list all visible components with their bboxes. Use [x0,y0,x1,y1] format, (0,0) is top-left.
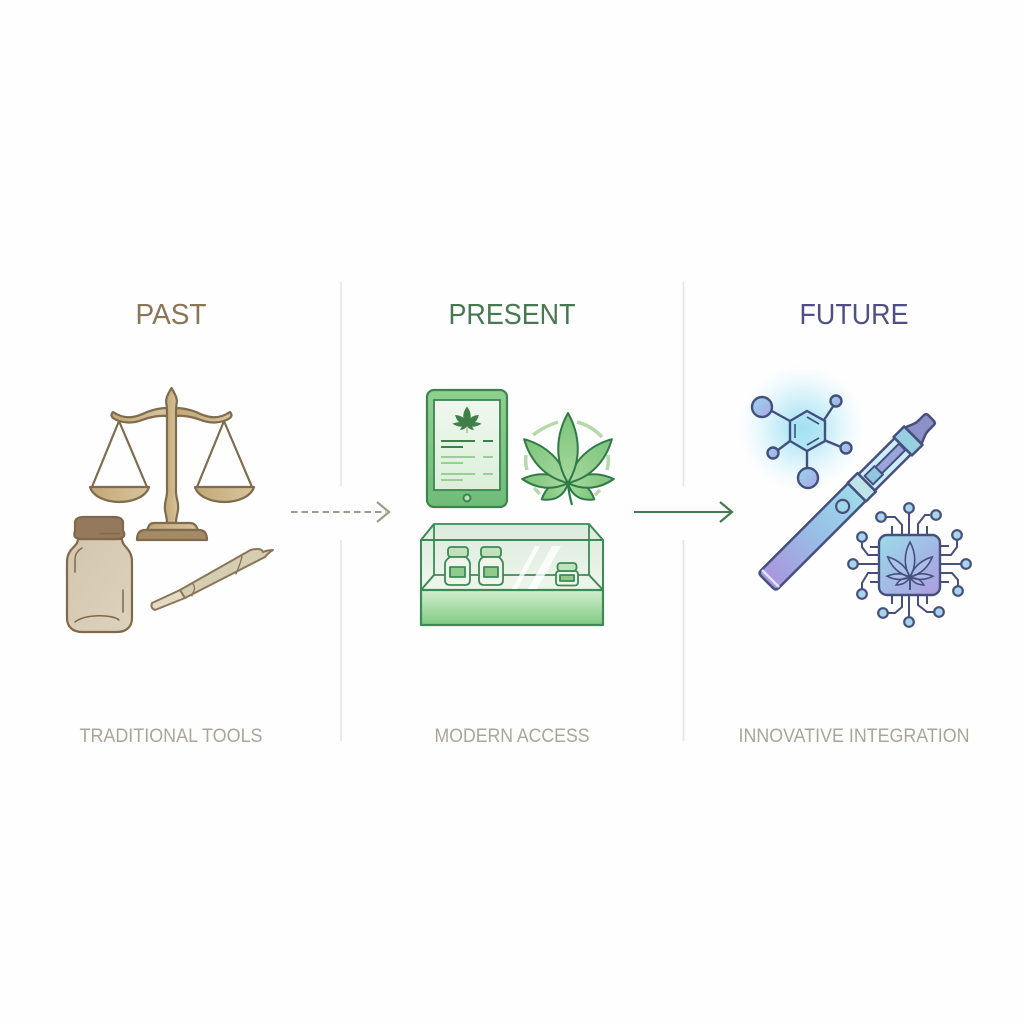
caption: modern access: MODERN ACCESS [434,726,590,747]
icon: vape pen [758,409,940,591]
arrow: past to present [291,502,389,522]
icon: tablet menu [427,390,507,507]
column dividers [341,282,684,741]
bottle 1 [445,547,470,585]
small jar [556,563,578,586]
icon: chip leaf [885,542,935,590]
caption: innovative integration: INNOVATIVE INTEGRATION [738,726,970,747]
icon: cannabis leaf with ring [518,413,618,505]
heading: PRESENT: PRESENT [448,299,576,331]
icon: balance scale [90,388,254,540]
glass glare [512,546,561,589]
arrow: present to future [634,502,732,522]
bottle 2 [479,547,503,585]
icon: small tablet leaf [453,407,481,433]
heading: FUTURE: FUTURE [800,299,908,331]
icon: glass jar [67,517,132,632]
caption: traditional tools: TRADITIONAL TOOLS [80,726,262,747]
icon: molecule with glow [738,364,866,492]
icon: rolled joint [151,549,273,610]
heading: PAST: PAST [136,299,207,331]
icon: display case with products [421,524,603,625]
icon: AI chip with leaf [848,503,971,627]
